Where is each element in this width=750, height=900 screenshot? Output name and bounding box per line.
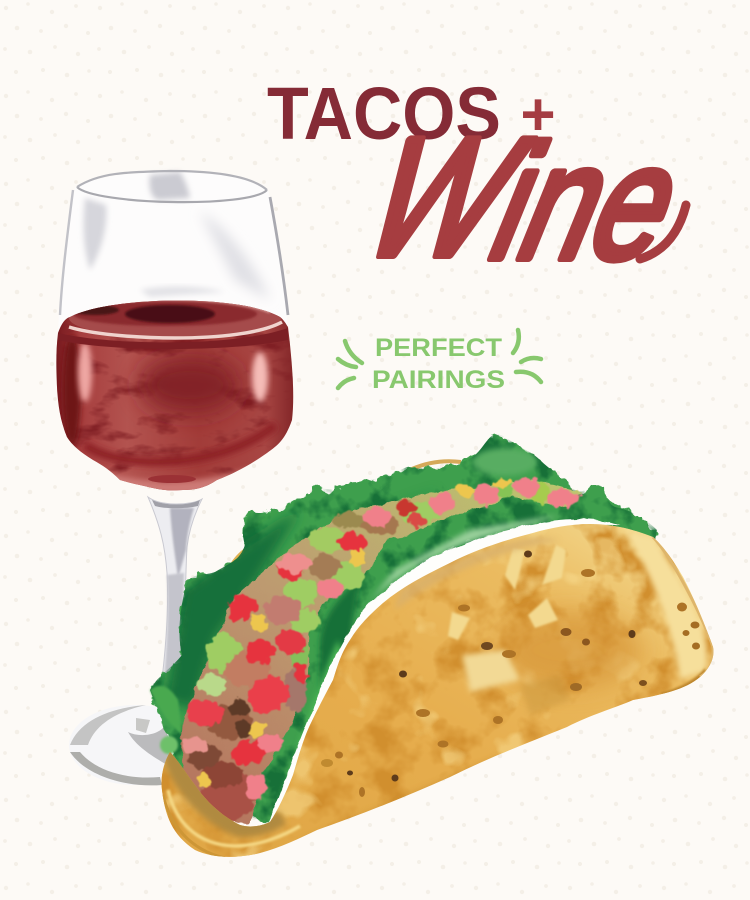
glass bowl — [58, 171, 288, 335]
brown meat — [188, 512, 399, 822]
crema edge — [268, 519, 620, 825]
heading: wine script: Wine — [334, 104, 553, 291]
tomato pieces — [186, 500, 426, 770]
yellow accents — [198, 479, 512, 786]
title — [267, 72, 556, 155]
glass stem — [148, 497, 202, 695]
back shell peek — [225, 461, 461, 577]
salsa base — [182, 480, 580, 823]
icon: right sparkle strokes — [513, 330, 541, 382]
pink tomato pieces — [182, 477, 580, 800]
red wine — [56, 300, 294, 490]
glass base — [69, 705, 201, 785]
subheading: perfect pairings: PAIRINGS — [372, 366, 505, 394]
lettuce — [140, 430, 670, 830]
shell speckles — [321, 550, 700, 797]
filling — [182, 477, 580, 823]
heading: wine script: ine — [468, 112, 709, 293]
illustration: wine glass — [50, 171, 300, 785]
taco shell — [150, 515, 725, 865]
heading: tacos: TACOS — [267, 72, 501, 155]
heading: plus sign: + — [520, 81, 556, 148]
subheading: perfect pairings: PERFECT — [375, 334, 502, 362]
green avocado chunks — [197, 483, 548, 695]
icon: left sparkle strokes — [338, 341, 362, 388]
illustration: taco — [140, 430, 725, 865]
subheading: perfect pairings — [338, 330, 541, 394]
heading: wine script — [334, 104, 709, 293]
